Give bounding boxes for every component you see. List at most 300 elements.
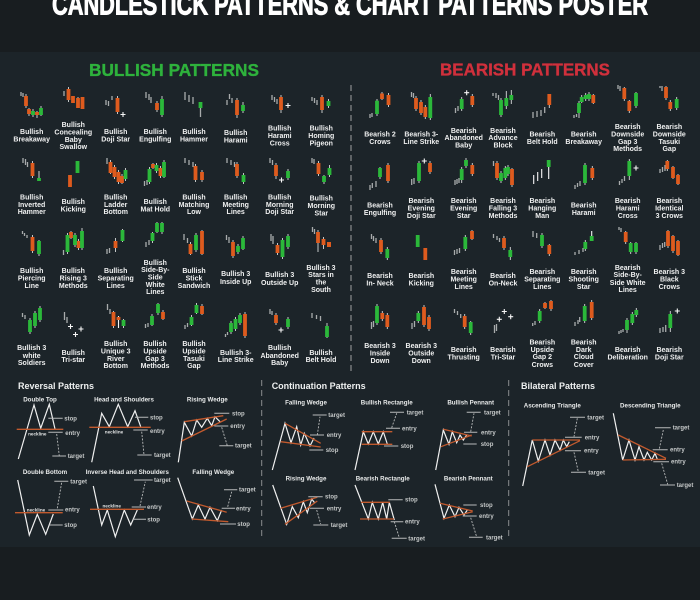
label: Breakaway [13, 136, 50, 144]
label: Bullish [144, 129, 167, 136]
candles [185, 158, 202, 182]
candles [455, 158, 472, 185]
label: Upside [531, 347, 554, 354]
label: Bearish 3- [404, 132, 438, 138]
label: Bearish [408, 273, 434, 280]
pattern: Bearish In-Neck [366, 234, 394, 288]
pattern: Bullish 3 Stars in the South [306, 227, 336, 294]
pattern: Bullish Morning Star [307, 158, 335, 218]
label: Bearish [571, 340, 597, 346]
candles [575, 231, 592, 255]
chart: double top: target [68, 454, 84, 460]
heading: bearish patterns: BEARISH PATTERNS [440, 60, 610, 80]
candles [533, 231, 549, 256]
label: Bearish [529, 340, 555, 346]
candles [660, 86, 677, 111]
label: Bearish [451, 198, 477, 205]
label: Bearish [451, 269, 477, 276]
chart: bullish pennant [436, 400, 501, 470]
chart: rising wedge: Rising Wedge [187, 396, 228, 404]
heading: continuation patterns: Continuation Patterns [272, 381, 366, 391]
label: Engulfing [139, 136, 171, 144]
chart: bullish pennant: Bullish Pennant [447, 400, 494, 406]
label: Abandoned [260, 353, 299, 360]
pattern: Bearish On-Neck [489, 234, 517, 288]
label: Harami [572, 210, 596, 217]
chart: inverse head and shoulders [86, 469, 171, 537]
chart: bullish pennant: target [484, 410, 501, 416]
label: Methods [489, 213, 517, 220]
label: Bullish [143, 341, 167, 348]
pattern: Bullish Homing Pigeon [308, 95, 334, 148]
label: Star [577, 284, 591, 291]
candles [454, 309, 471, 335]
label: Thrusting [448, 354, 480, 362]
pattern: Bullish Inverted Hammer [18, 158, 46, 216]
label: Star [314, 210, 328, 218]
chart: bearish rectangle [355, 476, 425, 542]
pattern: Bearish 2 Crows [364, 92, 396, 146]
candles [21, 92, 41, 118]
chart: bullish rectangle: stop [401, 444, 414, 450]
chart: falling wedge: Falling Wedge [285, 400, 327, 406]
chart: rising wedge [178, 396, 252, 462]
pattern: Bearish Kicking [408, 235, 434, 288]
label: Bullish [62, 350, 85, 357]
chart: inverse head and shoulders: neckline [103, 504, 121, 508]
label: Bearish [490, 273, 516, 280]
label: Man [535, 213, 549, 220]
label: Gap 2 [533, 354, 552, 361]
candles [454, 230, 472, 255]
label: Bearish [571, 269, 597, 276]
label: Swallow [59, 144, 88, 151]
label: Cross [618, 213, 638, 220]
label: Morning [307, 203, 335, 210]
label: Bullish 3- [220, 350, 251, 357]
candles [312, 95, 328, 113]
candles [312, 227, 329, 252]
chart: falling wedge: Falling Wedge [192, 469, 235, 476]
pattern: Bullish 3-Line Strike [218, 312, 254, 364]
candles [22, 306, 40, 334]
candles [312, 313, 327, 338]
pattern: Bullish Harami [224, 94, 248, 144]
chart: inverse head and shoulders: Inverse Head and Shoulders [86, 469, 169, 476]
candles [372, 234, 387, 260]
label: Outside [408, 350, 434, 358]
pattern: Bullish Side-By-Side White Lines [141, 222, 170, 296]
label: Bearish [367, 273, 393, 280]
label: Lines [227, 209, 245, 216]
chart: descending triangle [613, 402, 693, 489]
chart: rising wedge: target [235, 444, 252, 450]
candles [660, 308, 680, 333]
label: Engulfing [364, 210, 396, 217]
label: Line [25, 283, 39, 290]
label: Morning [266, 202, 294, 209]
label: Meeting [450, 276, 477, 284]
label: Sandwich [178, 283, 210, 290]
label: Separating [524, 276, 560, 284]
label: Rising 3 [60, 276, 87, 282]
candles [575, 300, 592, 326]
chart: double bottom: entry [65, 508, 80, 514]
candles [660, 160, 678, 185]
label: Doji Star [101, 136, 130, 144]
pattern: Bearish Upside Gap 2 Crows [529, 300, 555, 369]
label: Separating [98, 276, 134, 282]
candles [456, 90, 472, 113]
pattern: Bullish Concealing Baby Swallow [54, 87, 92, 151]
label: Dark [576, 347, 592, 354]
chart: bullish pennant: stop [481, 442, 494, 448]
pattern: Bullish Separating Lines [98, 229, 134, 290]
label: Bullish [310, 126, 333, 132]
pattern: Bullish 3 Outside Up [261, 234, 298, 287]
pattern: Bullish Rising 3 Methods [59, 228, 88, 290]
panel: bearish patterns [364, 85, 686, 369]
chart: bullish pennant: entry [481, 430, 496, 436]
label: Bullish [144, 199, 167, 206]
label: Cloud [574, 354, 594, 361]
chart: bullish rectangle [355, 400, 423, 470]
label: Baby [455, 142, 472, 150]
chart: double top: stop [64, 416, 77, 422]
candles [184, 230, 202, 255]
label: Bullish 3 [221, 271, 250, 278]
label: Lines [619, 287, 637, 294]
chart: descending triangle: entry [670, 448, 685, 454]
chart: double top: Double Top [23, 396, 57, 404]
pattern: Bearish Downside Tasuki Gap [653, 86, 686, 153]
label: Bearish [451, 347, 477, 354]
label: Down [412, 358, 431, 365]
candles [64, 312, 84, 337]
chart: ascending triangle: target [588, 470, 605, 476]
candles [107, 158, 126, 184]
heading: bullish patterns: BULLISH PATTERNS [89, 60, 259, 80]
label: Bullish [20, 194, 43, 202]
label: Bullish [62, 199, 85, 206]
label: Bearish [529, 198, 555, 205]
label: Pigeon [310, 140, 333, 148]
label: Bearish 3 [654, 269, 685, 276]
chart: bearish pennant: target [486, 535, 503, 541]
chart: falling wedge: entry [327, 433, 342, 439]
label: Lines [455, 284, 473, 291]
candles [620, 159, 638, 185]
candles [271, 234, 288, 259]
label: Upside [143, 348, 167, 356]
panel: bilateral patterns [521, 381, 693, 489]
label: Belt Hold [306, 357, 336, 364]
chart: double bottom: neckline [27, 508, 46, 512]
label: Bearish 3 [364, 343, 396, 350]
label: Baby [271, 360, 288, 367]
chart: descending triangle: target [673, 426, 689, 432]
candles [106, 96, 126, 117]
label: Bearish [490, 347, 516, 354]
label: Methods [59, 283, 88, 290]
pattern: Bearish Dark Cloud Cover [571, 300, 597, 369]
label: Doji Star [407, 213, 436, 220]
label: Advance [488, 135, 518, 142]
chart: bearish rectangle: Bearish Rectangle [356, 476, 410, 482]
candles [64, 87, 82, 109]
label: Kicking [61, 206, 86, 214]
label: Bearish 2 [364, 132, 396, 138]
chart: bullish rectangle: target [407, 410, 423, 416]
label: Doji Star [265, 209, 294, 216]
label: Stick [186, 276, 202, 282]
chart: ascending triangle: entry [584, 449, 599, 455]
label: Gap 3 [618, 139, 638, 146]
label: Block [493, 142, 513, 150]
candles [660, 230, 678, 256]
chart: descending triangle: target [677, 483, 693, 489]
chart: head and shoulders: neckline [105, 430, 124, 434]
label: Bearish [656, 124, 682, 131]
label: Bullish [20, 268, 43, 275]
candles [412, 305, 429, 331]
label: Kicking [409, 280, 434, 288]
pattern: Bearish Deliberation [607, 308, 648, 362]
pattern: Bearish 3 Inside Down [364, 304, 396, 365]
chart: bearish pennant [435, 476, 503, 541]
pattern: Bearish Falling 3 Methods [489, 161, 517, 220]
pattern: Bearish Thrusting [448, 309, 480, 362]
label: Methods [613, 146, 642, 153]
pattern: Bearish Doji Star [655, 308, 684, 362]
candles [226, 235, 243, 258]
label: Bottom [103, 363, 128, 370]
label: Bullish [309, 350, 333, 357]
pattern: Bearish Advance Block [488, 90, 518, 150]
candles [227, 158, 244, 184]
candles [107, 229, 122, 254]
label: Lines [146, 289, 165, 296]
chart: bearish pennant: stop [480, 503, 493, 509]
pattern: Bullish Unique 3 River Bottom [101, 304, 131, 370]
label: Tasuki [183, 356, 205, 363]
chart: rising wedge: Rising Wedge [286, 476, 327, 482]
pattern: Bullish Tri-star [61, 312, 85, 364]
label: Doji Star [655, 354, 684, 362]
chart: rising wedge: stop [232, 411, 245, 417]
chart: falling wedge: target [328, 413, 345, 419]
pattern: Bearish 3 Black Crows [654, 230, 685, 291]
candles [22, 231, 39, 256]
label: In- Neck [366, 280, 394, 288]
chart: rising wedge: entry [327, 506, 342, 512]
chart: falling wedge: stop [237, 522, 250, 528]
label: the [316, 280, 326, 286]
label: Stars in [308, 272, 334, 279]
label: Bullish [224, 194, 247, 202]
candles [370, 163, 388, 190]
heading: reversal patterns: Reversal Patterns [18, 381, 94, 391]
label: Downside [653, 132, 686, 138]
label: Bullish 3 [306, 265, 336, 272]
chart: bearish pennant: entry [479, 514, 494, 520]
label: Bullish [182, 194, 206, 202]
pattern: Bearish Downside Gap 3 Methods [611, 85, 644, 153]
pattern: Bullish Engulfing [139, 92, 171, 144]
candles [412, 158, 430, 185]
label: Bullish [268, 126, 291, 132]
chart: double bottom: stop [64, 523, 77, 529]
candles [494, 309, 513, 333]
candles [108, 304, 124, 328]
candles [70, 161, 78, 187]
label: Bullish [104, 268, 127, 275]
candles [185, 303, 202, 329]
pattern: Bullish 3 Inside Up [220, 235, 251, 286]
pattern: Bearish Identical 3 Crows [655, 160, 684, 220]
label: Bearish [656, 198, 682, 205]
label: Crows [369, 139, 391, 146]
chart: double bottom: target [70, 479, 87, 485]
candles [619, 308, 636, 334]
label: Concealing [54, 130, 92, 136]
label: Evening [450, 206, 477, 212]
label: Bearish [656, 347, 682, 354]
label: Bullish [224, 130, 247, 137]
label: Gap [187, 363, 201, 370]
label: Harami [224, 138, 248, 144]
label: Bullish [20, 129, 43, 136]
label: Cross [270, 140, 290, 148]
label: Crows [659, 284, 680, 291]
chart: head and shoulders: entry [150, 429, 165, 435]
chart: descending triangle: Descending Triangle [620, 402, 681, 410]
pattern: Bullish Kicking [61, 161, 86, 214]
candles [270, 309, 288, 332]
candles [494, 234, 510, 260]
candles [185, 92, 200, 117]
label: Inverted [18, 202, 45, 209]
label: Tasuki [658, 139, 680, 146]
label: Tri-star [61, 357, 85, 364]
candles [493, 90, 511, 117]
label: Soldiers [18, 360, 46, 367]
chart: head and shoulders: Head and Shoulders [94, 396, 154, 404]
label: Hammer [18, 209, 46, 216]
label: Upside [182, 348, 206, 356]
label: Unique 3 [101, 348, 131, 356]
label: Bearish [615, 265, 641, 272]
chart: double top: neckline [28, 432, 47, 436]
label: Inside [370, 350, 390, 358]
chart: rising wedge: stop [325, 495, 338, 501]
label: Cover [574, 362, 594, 369]
candles [370, 92, 388, 118]
pattern: Bullish Doji Star [101, 96, 130, 144]
label: Tri-Star [491, 354, 516, 362]
chart: head and shoulders: target [154, 453, 171, 459]
candles [270, 158, 288, 182]
candles [574, 92, 593, 118]
label: Bearish [490, 198, 516, 205]
label: White [146, 282, 165, 289]
pattern: Bearish Engulfing [364, 163, 396, 217]
label: River [107, 356, 125, 363]
label: Methods [141, 363, 169, 370]
label: On-Neck [489, 280, 517, 288]
label: Outside Up [261, 280, 298, 287]
label: Downside [611, 132, 644, 138]
label: Ladder [104, 202, 128, 209]
label: Bearish 3 [406, 343, 437, 350]
label: Hammer [180, 136, 208, 144]
chart: double bottom: Double Bottom [23, 469, 68, 476]
label: Harami [268, 133, 292, 140]
label: Bullish [182, 341, 206, 348]
chart: rising wedge: target [331, 523, 347, 529]
label: Bullish [182, 129, 206, 136]
label: Black [660, 276, 679, 284]
pattern: Bullish Meeting Lines [222, 158, 249, 216]
chart: bearish rectangle: stop [405, 498, 418, 504]
pattern: Bearish 3-Line Strike [403, 92, 439, 146]
chart: bearish rectangle: entry [405, 520, 420, 526]
label: Bearish [615, 124, 641, 131]
label: Bearish [571, 202, 597, 210]
chart: falling wedge: target [239, 488, 256, 494]
chart: rising wedge [273, 476, 347, 529]
chart: bullish rectangle: Bullish Rectangle [361, 400, 413, 406]
label: Line Strike [218, 357, 254, 364]
pattern: Bullish 3 White Soldiers [17, 306, 46, 367]
candles [575, 163, 592, 189]
label: Bullish [62, 122, 85, 129]
label: white [22, 353, 41, 360]
label: Bearish [451, 128, 477, 135]
label: Hanging [528, 206, 556, 212]
chart: inverse head and shoulders: target [154, 478, 171, 484]
label: Bullish [104, 341, 127, 348]
label: Abandoned [444, 135, 483, 142]
label: Side [148, 274, 163, 282]
label: Matching [179, 202, 209, 209]
chart: double top [17, 396, 84, 460]
label: Bullish [144, 260, 167, 267]
chart: head and shoulders: stop [150, 415, 163, 421]
pattern: Bullish Stick Sandwich [178, 230, 210, 290]
label: Bearish [615, 347, 641, 354]
label: Bearish [367, 202, 393, 210]
pattern: Bullish Abandoned Baby [260, 309, 299, 367]
pattern: Bullish Upside Gap 3 Methods [141, 303, 169, 370]
pattern: Bearish Meeting Lines [450, 230, 477, 291]
label: Piercing [18, 276, 46, 282]
pattern: Bearish Tri-Star [490, 309, 516, 362]
candles [312, 158, 330, 184]
label: Lines [107, 283, 125, 290]
label: Side White [610, 280, 646, 287]
pattern: Bullish Ladder Bottom [103, 158, 128, 216]
candles [227, 94, 243, 118]
label: Bullish [268, 194, 291, 202]
candles [146, 92, 162, 117]
label: Bearish [408, 198, 434, 205]
panel: continuation patterns [272, 381, 503, 542]
label: Gap [662, 146, 676, 153]
label: Belt Hold [527, 139, 558, 146]
candles [146, 303, 163, 328]
panel: bullish patterns [13, 87, 336, 370]
